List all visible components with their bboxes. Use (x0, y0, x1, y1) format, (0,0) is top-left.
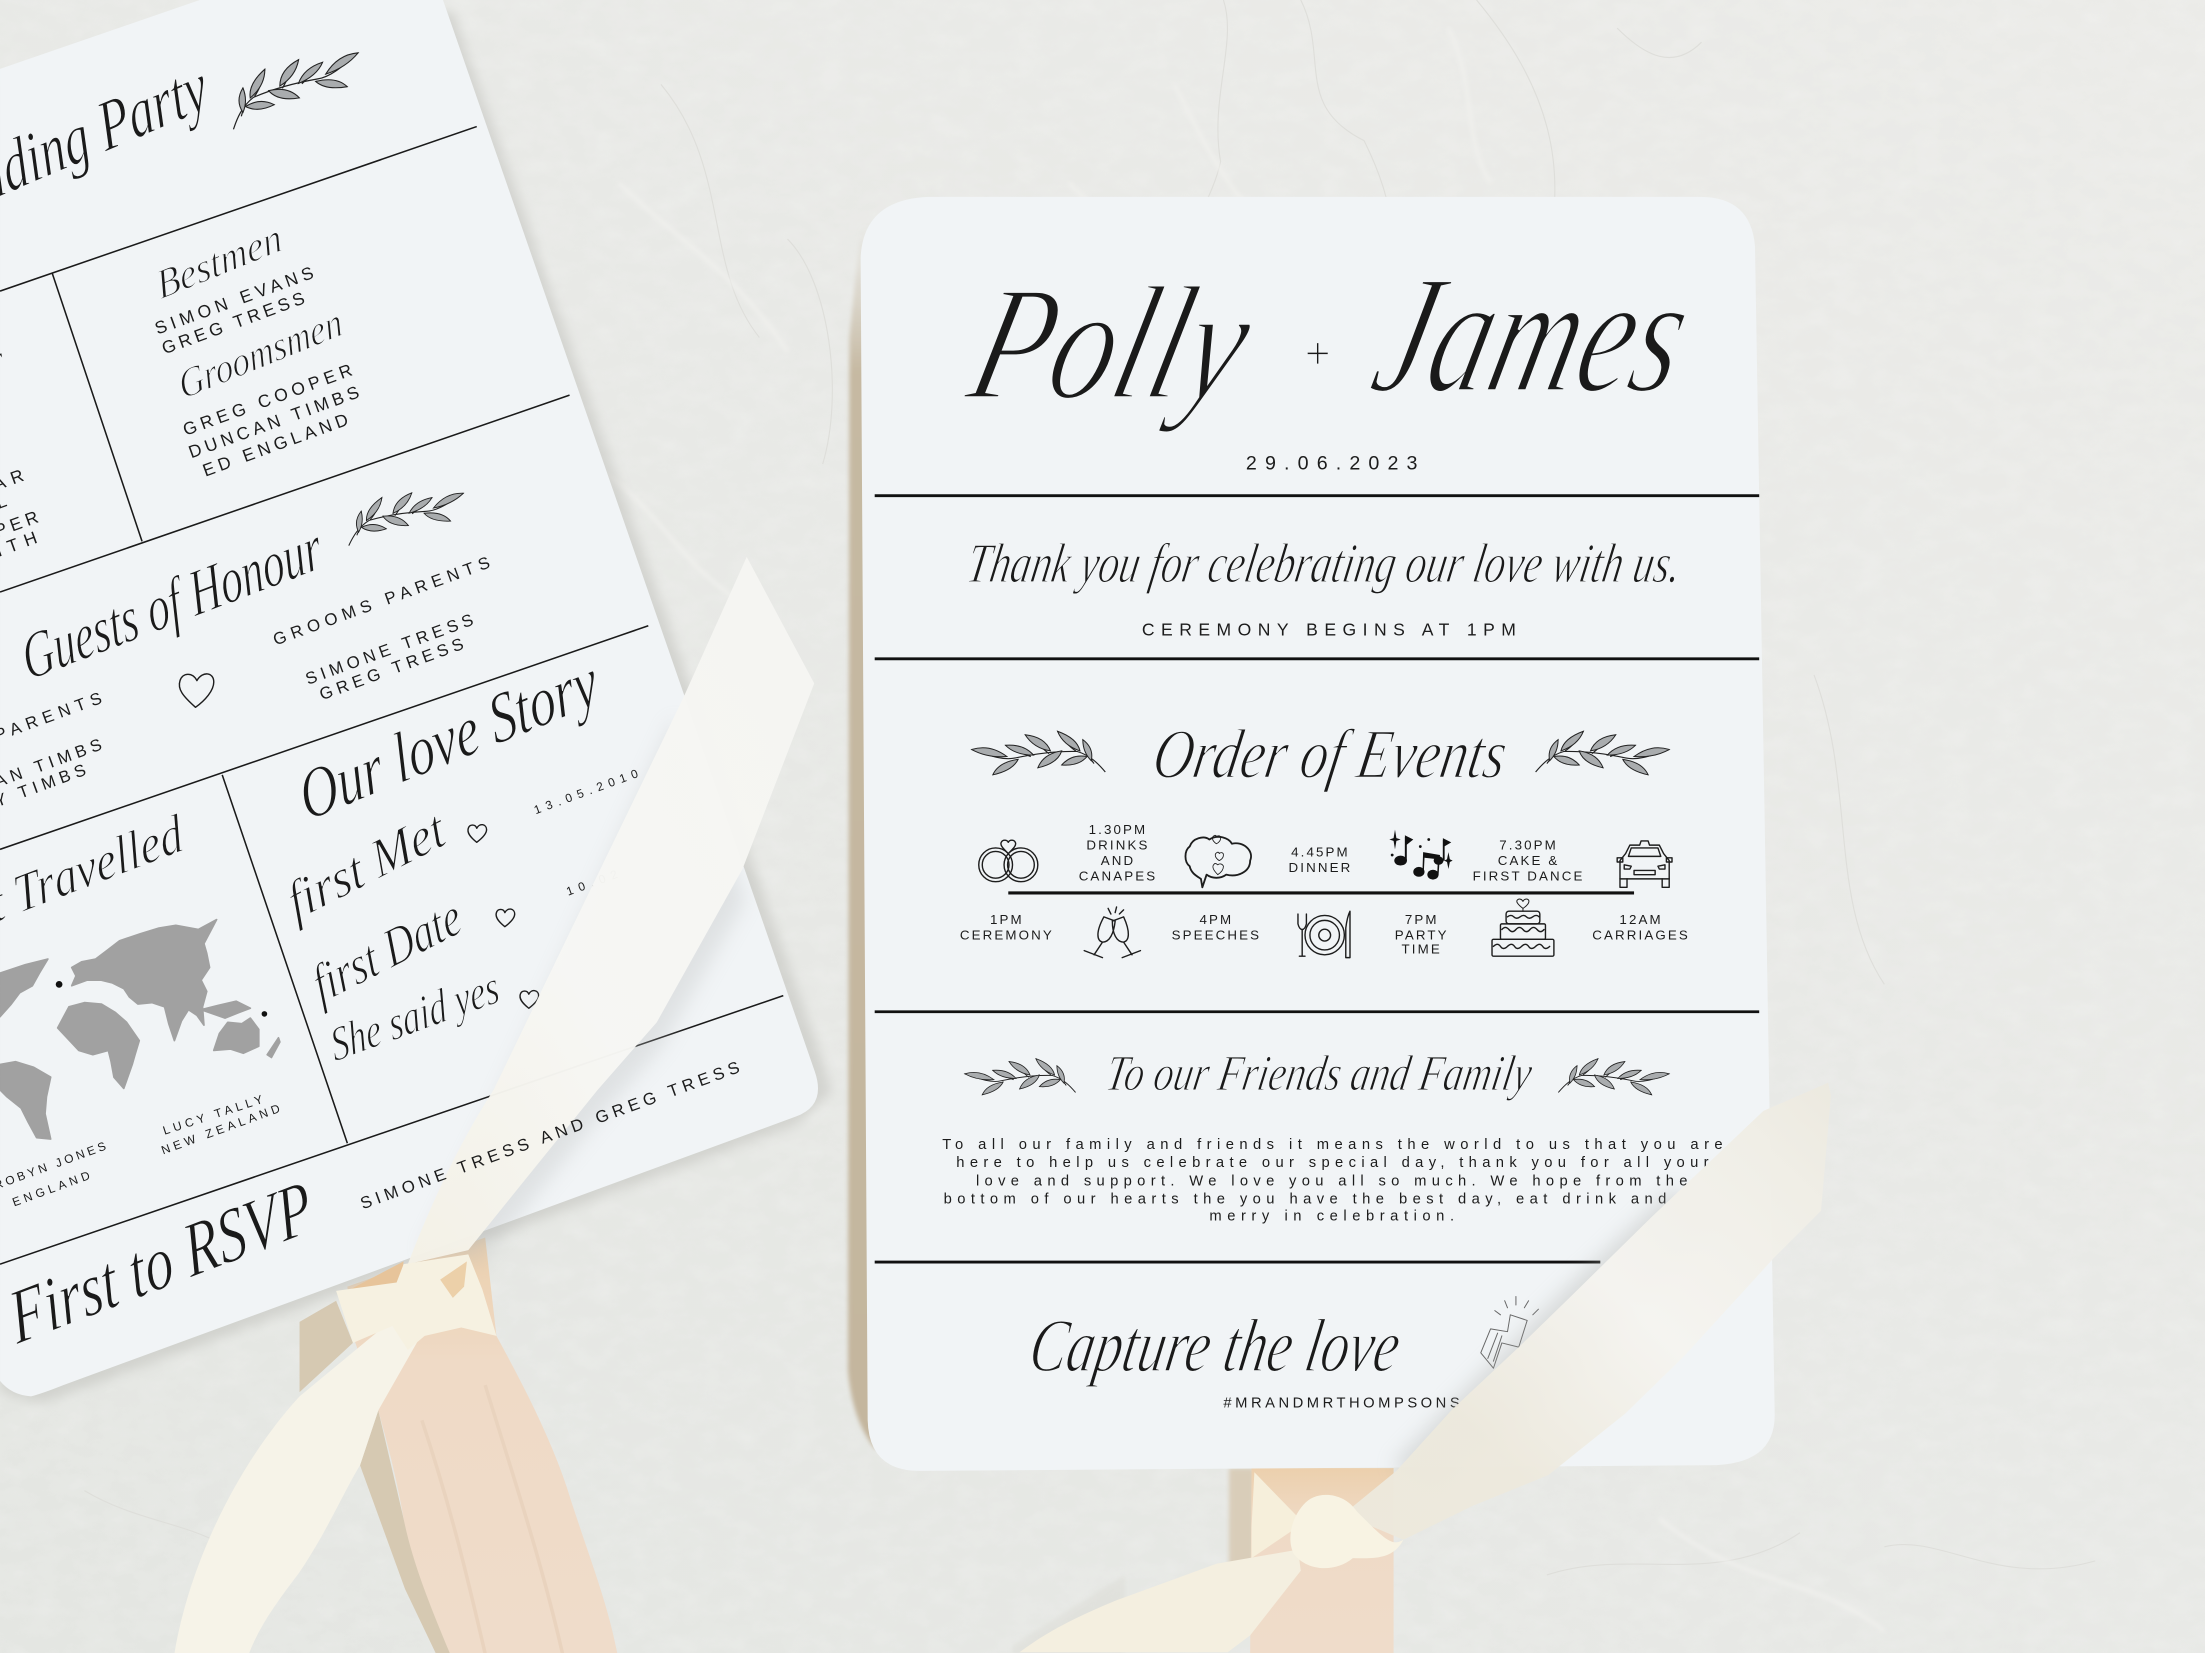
text: first Date: first Date (305, 885, 469, 1015)
divider (875, 1261, 1600, 1263)
divider (875, 658, 1759, 660)
paragraph: thank-you message: here to help us celebrate our special day, thank you for all your (956, 1155, 1709, 1171)
text: grooms parents (271, 553, 492, 704)
names: groomsmen: GREG COOPER (180, 360, 355, 440)
icon: right leaf sprig (1558, 1059, 1669, 1095)
left fan stick (347, 1237, 617, 1653)
text: furthest travelled names: LUCY TALLY (161, 1092, 264, 1138)
label: speeches (1172, 912, 1261, 942)
label: drinks and canapes: CANAPES (1079, 868, 1157, 883)
icon: right leaf sprig (1536, 731, 1669, 775)
timeline axis (1008, 892, 1634, 894)
icon: left leaf sprig (972, 731, 1105, 775)
card shape (861, 197, 1775, 1471)
shadow: left ribbon (422, 717, 745, 1266)
names: bestmen: SIMON EVANS (152, 262, 316, 338)
icon: camera and sparkles (1481, 1297, 1538, 1368)
text: furthest travelled names: ENGLAND (10, 1168, 92, 1209)
timeline panel (960, 822, 1690, 958)
label: cake and first dance: CAKE & (1498, 853, 1559, 868)
heading: Guests of Honour: Guests of Honour (15, 511, 329, 695)
label: cake and first dance (1473, 837, 1585, 883)
text: grooms parents: GREG TRESS (317, 634, 466, 704)
icon: speech cloud (1185, 835, 1251, 887)
paragraph: thank-you message: merry in celebration. (1209, 1209, 1454, 1225)
world map (0, 920, 280, 1139)
ribbon: left fan lower tail (174, 1322, 419, 1653)
dates (532, 766, 640, 899)
names: bestmen: GREG TRESS (159, 288, 307, 358)
label: drinks and canapes: AND (1101, 853, 1135, 868)
heading: Groomsmen: Groomsmen (174, 298, 347, 408)
icon: leaf sprig (217, 34, 368, 132)
divider (875, 495, 1759, 497)
text: furthest travelled names (0, 1092, 282, 1209)
text: brides parents (0, 689, 104, 811)
names: groomsmen (180, 360, 362, 480)
label: dinner (1289, 844, 1352, 875)
ribbon: left fan upper tail (408, 557, 814, 1264)
label: party time: 7PM (1405, 912, 1439, 927)
dates: 10.02 (564, 867, 620, 899)
ribbon: right fan lower tail (1020, 1550, 1301, 1652)
ribbon: right fan knot (1252, 1472, 1403, 1568)
wood peek above left knot (347, 1261, 404, 1297)
text: rsvp names: SIMONE TRESS AND GREG TRESS (358, 1058, 742, 1213)
label: drinks and canapes: 1.30PM (1089, 822, 1147, 837)
heading: Capture the love: Capture the love (1024, 1304, 1407, 1388)
names: groomsmen: DUNCAN TIMBS (186, 382, 362, 462)
paragraph: thank-you message (942, 1137, 1723, 1225)
icon: car (1617, 841, 1672, 887)
label: carriages: CARRIAGES (1592, 927, 1690, 942)
icon: heart (179, 674, 214, 707)
label: party time: TIME (1402, 941, 1442, 956)
text: grooms parents: SIMONE TRESS (303, 610, 476, 689)
title: Polly + James: + (1302, 328, 1333, 378)
panel: right fan card (order of the day) (861, 197, 1775, 1471)
label: cake and first dance: 7.30PM (1499, 837, 1558, 852)
dates: 13.05.2010 (532, 766, 640, 817)
text: furthest travelled names: NEW ZEALAND (159, 1101, 282, 1157)
card shape (0, 0, 818, 1396)
heading: Bestmen: Bestmen (151, 213, 286, 308)
ceremony time: CEREMONY BEGINS AT 1PM (1142, 620, 1516, 640)
icon: rings (979, 840, 1038, 882)
label: ceremony (960, 912, 1054, 942)
icon: wedding cake (1492, 899, 1554, 956)
icon: music notes (1389, 830, 1453, 880)
label: dinner: 4.45PM (1291, 844, 1350, 859)
title: Polly + James: James (1358, 241, 1708, 428)
text: She said yes: She said yes (326, 960, 504, 1073)
icon: heart (520, 991, 539, 1008)
left fan stick shadow (300, 1301, 453, 1653)
label: drinks and canapes: DRINKS (1086, 837, 1150, 852)
label: ceremony: CEREMONY (960, 927, 1054, 942)
shadow: right fan tan edge (848, 225, 900, 1448)
title: Polly + James: Polly (954, 252, 1270, 433)
heading: thank you: Thank you for celebrating our love with us. (962, 533, 1686, 595)
dividers (0, 127, 783, 1264)
label: speeches: SPEECHES (1172, 927, 1261, 942)
label: carriages: 12AM (1619, 912, 1663, 927)
shadow: left fan (0, 11, 833, 1403)
label: dinner: DINNER (1289, 860, 1352, 875)
right fan lower ribbon shadow (1013, 1575, 1125, 1653)
label: party time (1395, 912, 1449, 956)
icon: champagne glasses (1084, 907, 1140, 958)
heading: To our Friends and Family: To our Friends and Family (1102, 1046, 1537, 1102)
icon: leaf sprig (339, 477, 469, 548)
paragraph: thank-you message: bottom of our hearts the you have the best day, eat drink and (944, 1192, 1666, 1208)
label: speeches: 4PM (1200, 912, 1233, 927)
label: ceremony: 1PM (990, 912, 1024, 927)
text: grooms parents: GROOMS PARENTS (271, 553, 492, 649)
paragraph: thank-you message: love and support. We love you all so much. We hope from the (976, 1173, 1687, 1189)
icon: heart (468, 825, 487, 842)
icon: plate and cutlery (1298, 911, 1350, 958)
ribbon: left fan knot (336, 1254, 496, 1350)
icon: heart (496, 909, 515, 927)
label: carriages (1592, 912, 1690, 942)
hashtag: #MRANDMRTHOMPSONS (1223, 1396, 1460, 1412)
label: party time: PARTY (1395, 927, 1449, 942)
text: first Met: first Met (280, 797, 453, 932)
date: 29.06.2023 (1246, 453, 1418, 475)
label: drinks and canapes (1079, 822, 1157, 883)
ribbon: right fan upper tail (1350, 1083, 1831, 1540)
heading: Our love Story: Our love Story (292, 642, 606, 837)
panel: left fan card (wedding party) (0, 0, 818, 1396)
icon: left leaf sprig (965, 1059, 1076, 1095)
right fan stick shadow (1229, 1468, 1254, 1567)
shadow: right ribbon (1392, 1188, 1716, 1491)
heading: Order of Events: Order of Events (1148, 716, 1513, 794)
heading: First to RSVP: First to RSVP (1, 1163, 320, 1361)
paragraph: thank-you message: To all our family and friends it means the world to us that you are (942, 1137, 1723, 1153)
label: cake and first dance: FIRST DANCE (1473, 868, 1585, 883)
divider (875, 1011, 1759, 1013)
partial names: cut-off left column (0, 465, 41, 561)
title: Polly + James (954, 241, 1708, 433)
right fan stick (1250, 1468, 1394, 1653)
names: groomsmen: ED ENGLAND (200, 409, 351, 480)
map markers (56, 981, 267, 1017)
